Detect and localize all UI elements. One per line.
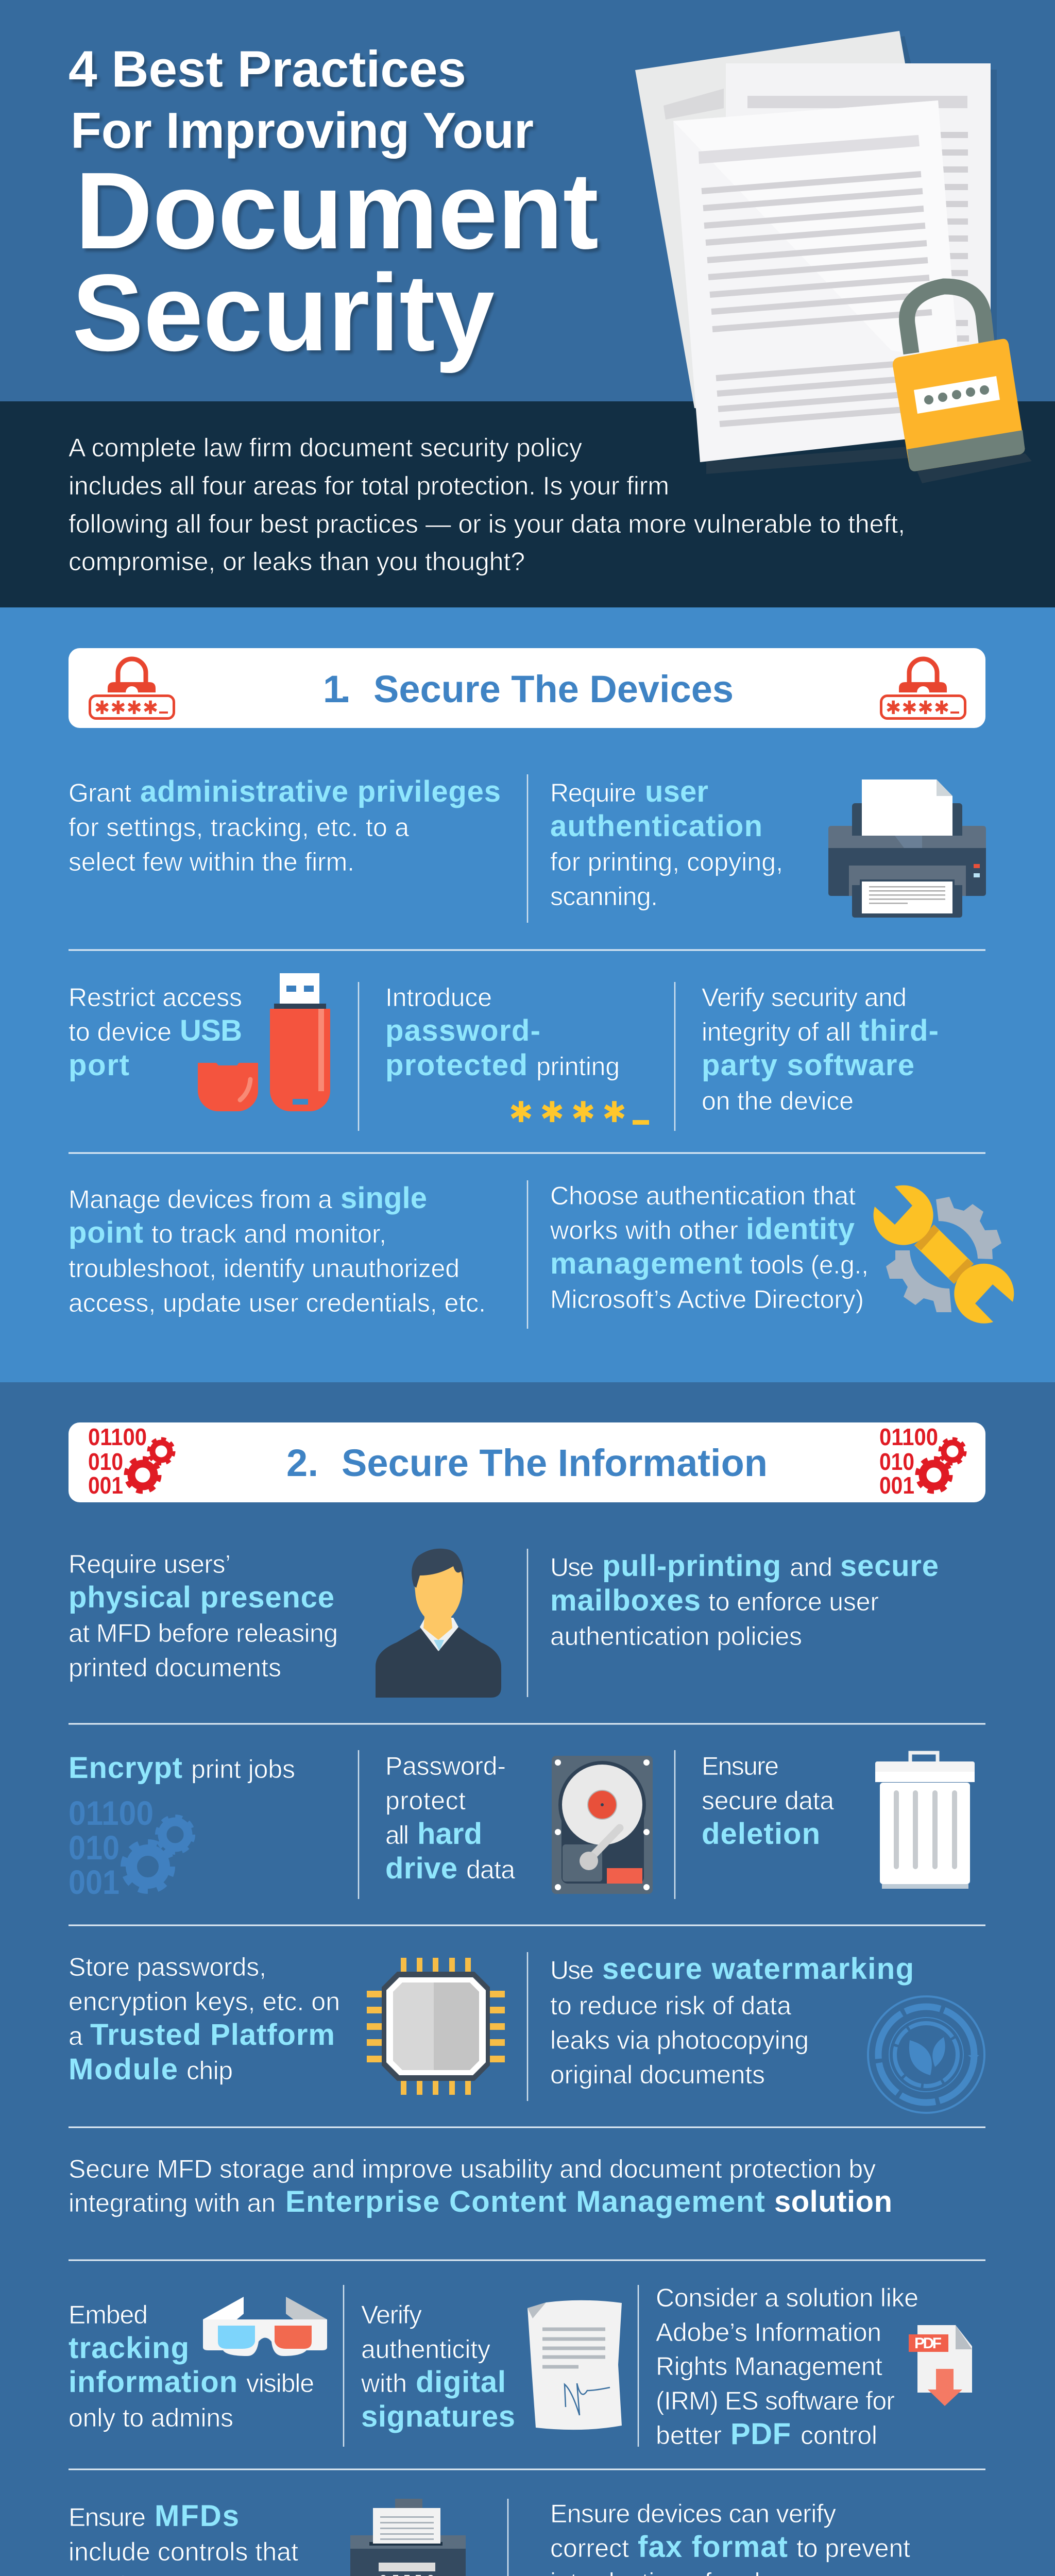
panel: section 2 header: [69, 1422, 985, 1502]
heading: Secure The Devices: Secure The Devices: [373, 668, 734, 710]
text: trusted platform module: Store passwords,: [69, 1953, 266, 1981]
panel: section 2 background: [0, 1382, 1055, 2576]
text: password-protected printing: [385, 983, 620, 1082]
text: physical presence: printed documents: [69, 1653, 281, 1682]
text: user authentication: authentication: [550, 809, 762, 843]
text: USB port: USB: [180, 1014, 242, 1047]
text: single point: troubleshoot, identify unauthorized: [69, 1254, 460, 1283]
text: password-protected printing: Introduce: [385, 983, 492, 1012]
text: password-protect hard drive: all: [385, 1821, 409, 1850]
icon: password lock left: ✱✱✱✱: [94, 698, 158, 719]
text: PDF control: (IRM) ES software for: [656, 2386, 895, 2415]
icon: binary gears right: 01100: [879, 1423, 938, 1450]
icon: wrench and gears: [874, 1185, 1014, 1324]
icon: password lock right: [881, 659, 965, 719]
text: PDF control: Rights Management: [656, 2352, 882, 2381]
text: PDF control: Consider a solution like: [656, 2283, 918, 2312]
text: single point: Manage devices from a: [69, 1185, 332, 1214]
text: identity management: tools (e.g.,: [750, 1250, 869, 1279]
text: identity management: Microsoft’s Active Directory): [550, 1285, 864, 1314]
icon: binary gears left: 010: [88, 1448, 123, 1475]
icon: password lock left: [90, 659, 174, 719]
heading: Secure The Information: 2.: [286, 1442, 318, 1484]
text: secure watermarking: to reduce risk of data: [550, 1991, 791, 2020]
intro text: [69, 433, 905, 576]
text: third-party software: on the device: [702, 1087, 854, 1115]
text: enterprise content management: Secure MFD storage and improve usability and document protection by: [69, 2155, 876, 2183]
icon: binary gears right: 010: [879, 1448, 914, 1475]
text: single point: single: [341, 1181, 427, 1215]
icon: binary gears left: 001: [88, 1472, 123, 1499]
text: password-protect hard drive: data: [466, 1855, 515, 1884]
text: single point: access, update user credentials, etc.: [69, 1289, 486, 1317]
title: [69, 40, 599, 374]
text: secure data deletion: Ensure: [702, 1752, 779, 1781]
heading: Secure The Information: Secure The Information: [342, 1442, 768, 1484]
text: USB port: to device: [69, 1018, 172, 1046]
icon: binary gears left: [88, 1423, 174, 1499]
icon: binary gears blue: 010: [69, 1828, 120, 1867]
text: MFDs restrict access: Ensure: [69, 2503, 146, 2532]
icon: 3D glasses: [203, 2297, 327, 2356]
text: MFDs restrict access: MFDs: [155, 2499, 239, 2533]
text: password-protect hard drive: drive: [385, 1852, 457, 1885]
text: digital signatures: with: [361, 2369, 407, 2398]
text: single point: to track and monitor,: [151, 1219, 386, 1248]
text: pull-printing and secure mailboxes: to enforce user: [708, 1587, 879, 1616]
text: physical presence: Require users’: [69, 1550, 231, 1579]
text: encrypt print jobs: Encrypt: [69, 1751, 182, 1785]
icon: trash can: [875, 1753, 975, 1889]
text: PDF control: Adobe’s Information: [656, 2318, 881, 2347]
text: enterprise content management: [69, 2155, 892, 2218]
text: secure watermarking: original documents: [550, 2060, 765, 2089]
text: password-protected printing: printing: [536, 1052, 620, 1081]
text: user authentication: for printing, copying,: [550, 848, 783, 876]
title: Security: [72, 251, 495, 374]
text: tracking information: only to admins: [69, 2403, 233, 2432]
intro text: includes all four areas for total protection. Is your firm: [69, 471, 669, 500]
text: single point: [69, 1181, 486, 1317]
text: third-party software: Verify security and: [702, 983, 907, 1012]
text: MFDs restrict access: include controls that: [69, 2537, 298, 2566]
text: PDF control: better: [656, 2421, 722, 2450]
text: tracking information: visible: [246, 2369, 314, 2398]
icon: hard drive: [552, 1756, 653, 1894]
text: identity management: [550, 1181, 869, 1314]
intro text: compromise, or leaks than you thought?: [69, 547, 525, 576]
text: identity management: management: [550, 1247, 742, 1280]
text: trusted platform module: Trusted Platform: [90, 2018, 335, 2052]
icon: binary gears blue: [69, 1794, 193, 1901]
text: physical presence: physical presence: [69, 1581, 334, 1614]
text: administrative privileges: for settings, tracking, etc. to a: [69, 813, 409, 842]
text: password-protect hard drive: hard: [417, 1817, 482, 1851]
panel: hero background: [0, 0, 1055, 401]
icon: printer: [828, 779, 986, 918]
text: password-protected printing: password-: [385, 1014, 540, 1047]
text: user authentication: Require: [550, 778, 636, 807]
icon: yellow password asterisks: ✱✱✱✱: [509, 1096, 626, 1129]
icon: signed document: [528, 2300, 622, 2430]
text: secure watermarking: [550, 1952, 914, 2089]
text: third-party software: [702, 983, 939, 1115]
text: user authentication: [550, 775, 783, 911]
text: secure watermarking: Use: [550, 1956, 594, 1985]
text: trusted platform module: [69, 1953, 340, 2086]
text: tracking information: tracking: [69, 2331, 189, 2365]
text: pull-printing and secure mailboxes: [550, 1549, 939, 1651]
text: trusted platform module: encryption keys, etc. on: [69, 1987, 340, 2016]
text: MFDs restrict access: [69, 2499, 298, 2576]
text: secure data deletion: deletion: [702, 1817, 820, 1851]
icon: documents with padlock: [635, 31, 1032, 483]
text: trusted platform module: chip: [186, 2056, 233, 2085]
text: PDF control: PDF: [730, 2417, 791, 2451]
icon: binary gears blue: 001: [69, 1863, 120, 1901]
text: user authentication: user: [645, 775, 708, 808]
text: secure watermarking: leaks via photocopying: [550, 2026, 809, 2055]
icon: chip: [367, 1958, 505, 2095]
icon: PDF download: PDF: [914, 2335, 942, 2352]
icon: USB drive: [198, 973, 330, 1111]
text: third-party software: integrity of all: [702, 1018, 851, 1046]
text: fax format: to prevent: [796, 2534, 910, 2563]
text: pull-printing and secure mailboxes: pull-printing: [602, 1549, 781, 1583]
text: PDF control: [656, 2283, 918, 2451]
text: third-party software: third-: [859, 1014, 939, 1047]
text: administrative privileges: Grant: [69, 778, 131, 807]
text: physical presence: at MFD before releasing: [69, 1619, 338, 1648]
icon: password lock right: ✱✱✱✱: [886, 698, 949, 719]
text: tracking information: Embed: [69, 2300, 148, 2329]
text: pull-printing and secure mailboxes: and: [790, 1553, 832, 1582]
icon: binary gears blue: 01100: [69, 1794, 154, 1832]
panel: section 1 background: [0, 607, 1055, 1382]
text: secure data deletion: secure data: [702, 1786, 834, 1815]
text: pull-printing and secure mailboxes: secure: [840, 1549, 939, 1583]
text: password-protect hard drive: [385, 1752, 515, 1885]
title: For Improving Your: [71, 102, 534, 159]
text: PDF control: control: [801, 2421, 877, 2450]
text: trusted platform module: Module: [69, 2053, 178, 2086]
text: administrative privileges: administrative privileges: [140, 775, 501, 808]
text: encrypt print jobs: print jobs: [191, 1755, 295, 1784]
text: enterprise content management: solution: [774, 2185, 892, 2218]
text: fax format: Ensure devices can verify: [550, 2499, 836, 2528]
text: identity management: identity: [746, 1212, 855, 1246]
icon: fax machine: [350, 2499, 466, 2576]
text: trusted platform module: a: [69, 2022, 83, 2050]
text: administrative privileges: [69, 775, 501, 876]
icon: watermark seal: [868, 1996, 984, 2113]
text: fax format: [550, 2499, 910, 2576]
text: fax format: fax format: [638, 2530, 788, 2564]
text: password-protected printing: protected: [385, 1048, 528, 1082]
text: pull-printing and secure mailboxes: Use: [550, 1553, 594, 1582]
text: single point: point: [69, 1216, 143, 1249]
intro text: following all four best practices — or is your data more vulnerable to theft,: [69, 510, 905, 538]
title: 4 Best Practices: [69, 40, 466, 97]
heading: Secure The Devices: 1.: [323, 668, 351, 710]
text: USB port: port: [69, 1048, 129, 1082]
text: user authentication: scanning.: [550, 882, 658, 911]
icon: binary gears right: [879, 1423, 965, 1499]
text: third-party software: party software: [702, 1048, 914, 1082]
text: digital signatures: signatures: [361, 2400, 515, 2433]
text: pull-printing and secure mailboxes: authentication policies: [550, 1622, 802, 1651]
text: tracking information: [69, 2300, 314, 2432]
panel: intro band background: [0, 401, 1055, 607]
text: digital signatures: [361, 2300, 515, 2433]
text: enterprise content management: Enterprise Content Management: [285, 2185, 765, 2218]
text: enterprise content management: integrating with an: [69, 2189, 276, 2217]
text: identity management: Choose authentication that: [550, 1181, 856, 1210]
icon: binary gears right: 001: [879, 1472, 914, 1499]
text: USB port: [69, 983, 242, 1082]
text: fax format: correct: [550, 2534, 629, 2563]
text: USB port: Restrict access: [69, 983, 242, 1012]
text: identity management: works with other: [550, 1216, 738, 1245]
text: administrative privileges: select few within the firm.: [69, 848, 354, 876]
panel: section 1 header: [69, 648, 985, 728]
text: secure data deletion: [702, 1752, 834, 1851]
text: password-protect hard drive: protect: [385, 1786, 466, 1815]
icon: PDF download: [909, 2325, 972, 2406]
text: digital signatures: authenticity: [361, 2335, 490, 2364]
text: pull-printing and secure mailboxes: mailboxes: [550, 1584, 701, 1617]
text: password-protect hard drive: Password-: [385, 1752, 506, 1781]
icon: binary gears left: 01100: [88, 1423, 147, 1450]
intro text: A complete law firm document security policy: [69, 433, 582, 462]
icon: person: [376, 1549, 501, 1698]
text: digital signatures: digital: [416, 2365, 506, 2399]
text: digital signatures: Verify: [361, 2300, 422, 2329]
title: Document: [75, 149, 599, 272]
text: secure watermarking: secure watermarking: [602, 1952, 914, 1986]
text: tracking information: information: [69, 2365, 237, 2399]
text: physical presence: [69, 1550, 338, 1682]
